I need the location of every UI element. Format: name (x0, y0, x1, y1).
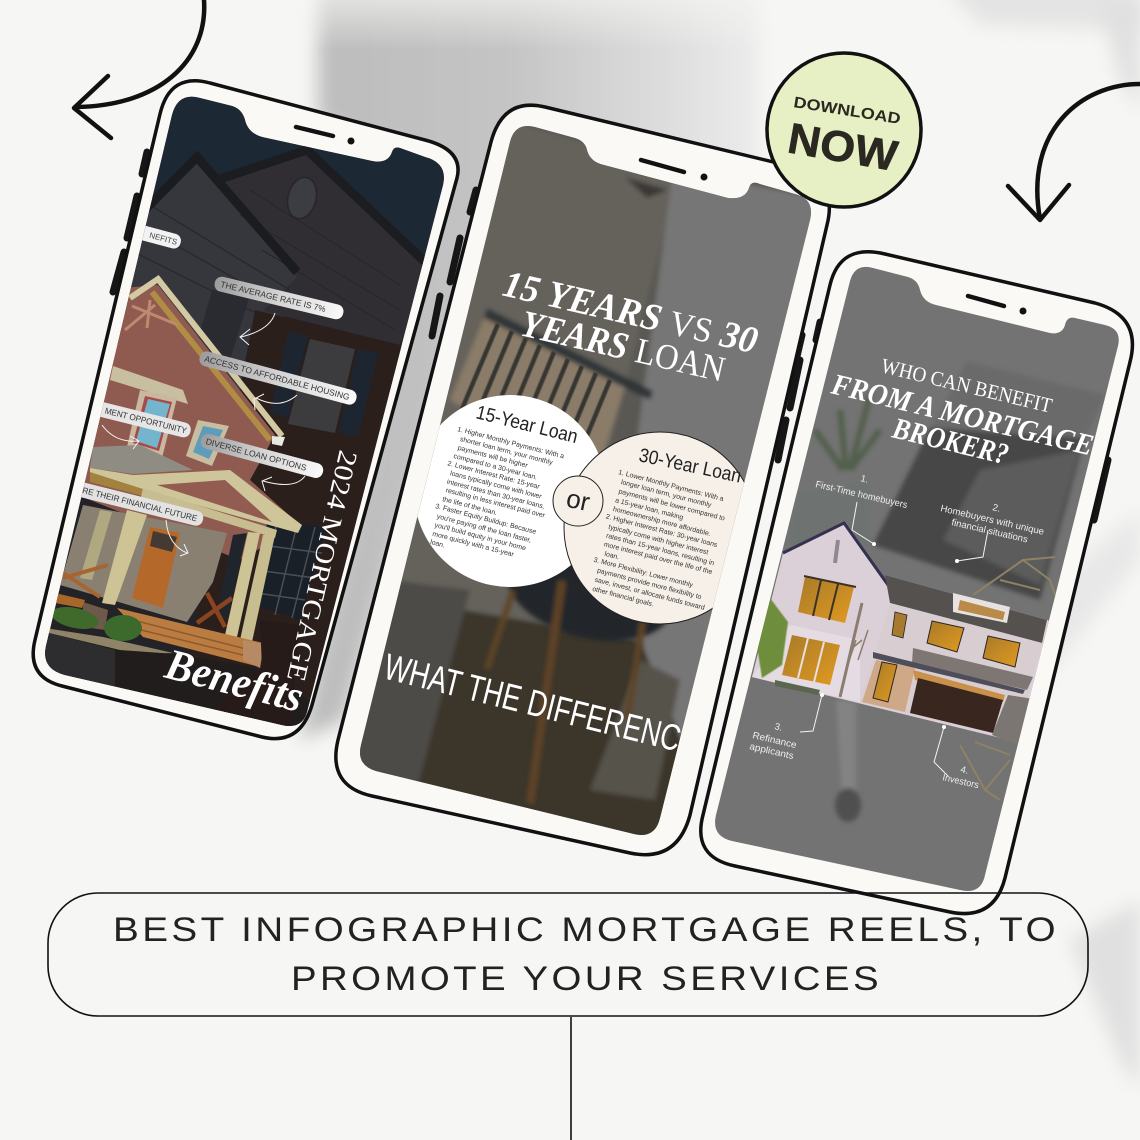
phone body (336, 105, 829, 855)
label 2: homebuyers with unique financial situations: financial situations (950, 517, 1029, 546)
label pill: diverse loan options (199, 432, 325, 480)
15-year loan text (430, 426, 564, 556)
label 2: homebuyers with unique financial situations: 2. (991, 502, 1002, 515)
screen content (380, 263, 762, 759)
heading: 15 years vs 30 years loan: 15 YEARS VS 30 (499, 263, 762, 362)
label pill: investment opportunity: MENT OPPORTUNITY (104, 405, 188, 436)
label 1: first-time homebuyers: First-Time homebuyers (814, 479, 909, 511)
30-year loan text: 1. Lower Monthly Payments: With a (617, 469, 724, 503)
notch speaker and camera (968, 296, 1026, 314)
circle: 30-year loan (564, 432, 756, 624)
label 3: refinance applicants: 3. (773, 721, 784, 734)
label pill: affordable housing: ACCESS TO AFFORDABLE HOUSING (203, 354, 351, 402)
15-year loan text: the life of the loan. (442, 496, 498, 517)
15-year loan text: payments will be higher (457, 445, 529, 470)
script title: Benefits: Benefits (160, 639, 308, 722)
heading: who can benefit from a mortgage broker: BROKER? (889, 412, 1012, 471)
label 3: refinance applicants: applicants (748, 741, 795, 762)
circle: 30-year loan: 30-Year Loan (637, 444, 743, 488)
screen content (748, 354, 1097, 791)
label pill: benefits (142, 226, 181, 248)
15-year loan text: shorter loan term, your monthly (459, 436, 554, 467)
circle: or (553, 476, 603, 526)
30-year loan text: longer loan term, your monthly (620, 479, 712, 509)
heading: who can benefit from a mortgage broker: WHO CAN BENEFIT (879, 354, 1055, 418)
label 4: investors (934, 725, 980, 791)
caption text line 1: BEST INFOGRAPHIC MORTGAGE REELS, TO (113, 911, 1059, 949)
label pill: the average rate: THE AVERAGE RATE IS 7% (219, 279, 327, 314)
30-year loan text: save, invest, or allocate funds toward (594, 577, 706, 612)
phone body (701, 252, 1132, 914)
badge: download now: NOW (784, 115, 901, 181)
circle: 15-year loan (414, 395, 606, 587)
caption text line 2: PROMOTE YOUR SERVICES (291, 960, 882, 998)
30-year loan text: 3. More Flexibility: Lower monthly (593, 557, 694, 589)
heading: who can benefit from a mortgage broker: FROM A MORTGAGE (827, 368, 1097, 462)
screen labels (81, 226, 357, 710)
vertical connector line (570, 1017, 572, 1140)
heading: what the difference: WHAT THE DIFFERENC (380, 646, 685, 759)
15-year loan text: compared to a 30-year loan. (453, 453, 538, 481)
badge: download now (767, 53, 921, 207)
30-year loan text: loan. (604, 551, 620, 561)
15-year loan text: you're paying off the loan faster, (436, 513, 532, 544)
30-year loan text: a 15-year loan, making (614, 497, 684, 522)
15-year loan text: loans typically come with lower (449, 470, 543, 501)
caption pill: best infographic mortgage reels (48, 893, 1088, 1016)
label pill: benefits: NEFITS (148, 231, 178, 247)
screen photo: blurred room with chair (360, 126, 811, 835)
screen photo: overlay with modern house (715, 266, 1119, 891)
30-year loan text (592, 470, 724, 610)
15-year loan text: you'll build equity in your home (434, 522, 527, 552)
label 3: refinance applicants: Refinance (751, 730, 798, 751)
circle: 15-year loan: 15-Year Loan (474, 402, 580, 448)
30-year loan text: more interest paid over the life of the (603, 541, 713, 576)
side buttons (432, 190, 802, 430)
label 2: homebuyers with unique financial situations (939, 502, 1045, 563)
15-year loan text: 1. Higher Monthly Payments: With a (456, 426, 565, 460)
heading: 15 years vs 30 years loan: YEARS LOAN (517, 303, 729, 391)
side buttons (113, 152, 147, 292)
notch speaker and camera (296, 127, 354, 144)
vertical title: 2024 MORTGAGE (281, 448, 363, 684)
15-year loan text: resulting in less interest paid over (445, 487, 546, 520)
15-year loan text: more quickly with a 15-year (432, 531, 515, 559)
label pill: financial future: RE THEIR FINANCIAL FUTURE (81, 485, 199, 523)
label 1: first-time homebuyers (814, 473, 909, 546)
label 4: investors: Investors (941, 772, 980, 791)
arrow: top left curved arrow (74, 0, 204, 138)
arrow: top right curved arrow (1008, 84, 1140, 220)
label 2: homebuyers with unique financial situations: Homebuyers with unique (939, 503, 1045, 538)
30-year loan text: other financial goals. (591, 586, 654, 608)
house photo (752, 523, 1060, 746)
side buttons (778, 322, 1108, 520)
screen photo: house (45, 96, 444, 726)
30-year loan text: payments provide more flexibility to (596, 567, 702, 601)
notch speaker and camera (641, 160, 708, 180)
phone: right, who can benefit (700, 250, 1140, 914)
phone: center, 15 vs 30 years loan (336, 105, 830, 855)
30-year loan text: 2. Higher Interest Rate: 30-year loans (605, 513, 719, 549)
30-year loan text: payments will be lower compared to (618, 488, 726, 523)
15-year loan text: interest rates than 30-year loans, (446, 479, 545, 511)
15-year loan text: 3. Faster Equity Buildup: Because (435, 503, 537, 536)
label 1: first-time homebuyers: 1. (859, 473, 870, 486)
porch (90, 445, 193, 474)
badge: download now: DOWNLOAD (792, 94, 902, 128)
30-year loan text: typically come with higher interest (607, 524, 709, 556)
label 3: refinance applicants (748, 693, 824, 762)
label 4: investors: 4. (959, 764, 970, 777)
circle: or: or (564, 483, 593, 517)
label pill: diverse loan options: DIVERSE LOAN OPTIONS (205, 436, 308, 473)
15-year loan text: loan. (429, 539, 446, 550)
15-year loan text: 2. Lower Interest Rate: 15-year (447, 460, 541, 491)
curved white arrows (102, 313, 305, 556)
30-year loan text: rates than 15-year loans, resulting in (605, 533, 715, 567)
label pill: the average rate (213, 275, 345, 321)
30-year loan text: homeownership more affordable. (612, 506, 711, 538)
phone: left, mortgage benefits (30, 80, 460, 740)
phone body (33, 81, 458, 739)
